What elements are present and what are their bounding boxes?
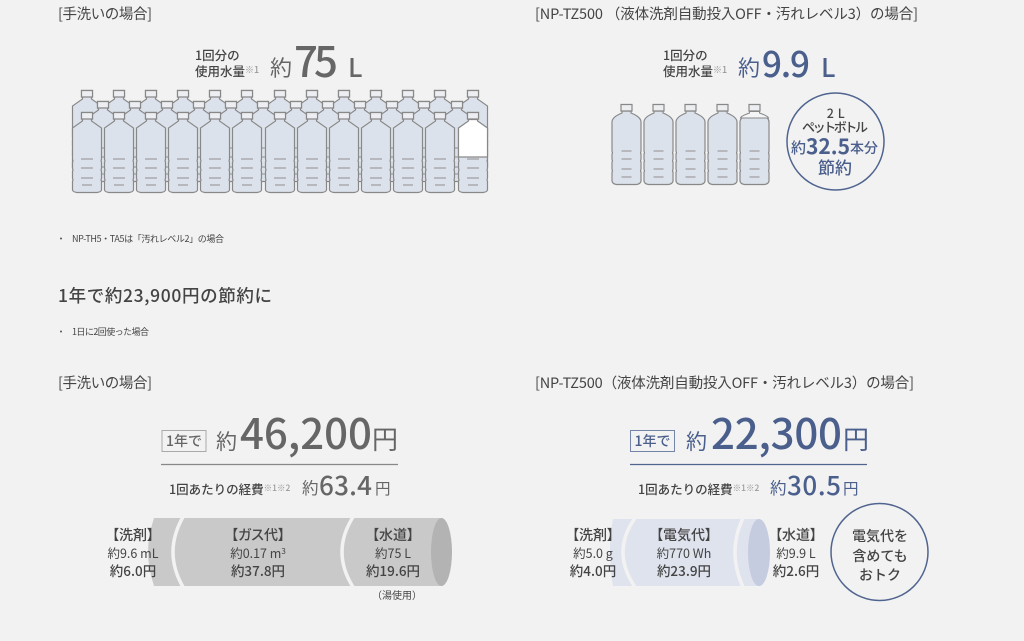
per-wash cost: 63.4 — [319, 466, 372, 503]
per-wash cost: 約 — [770, 475, 786, 499]
footnote: used twice a day: 1日に2回使った場合 — [72, 325, 149, 338]
label: water per wash: 1回分の — [195, 45, 240, 64]
value: 22,300 yen: 円 — [843, 420, 869, 457]
per-wash cost: 30.5 — [787, 466, 841, 503]
heading: NP-TZ500, cost: [NP-TZ500（液体洗剤自動投入OFF・汚れレベル3）の場合] — [535, 372, 914, 393]
badge: 32.5 bottles saved: 節約 — [818, 154, 852, 179]
detergent: 約9.6 mL — [107, 543, 159, 562]
badge: 32.5 bottles saved: ペットボトル — [802, 117, 868, 136]
electricity: 約23.9円 — [657, 560, 711, 580]
badge: includes electricity, still cheaper: おトク — [859, 565, 901, 585]
value: about 75 L — [270, 29, 363, 90]
hand washing water usage figure — [195, 29, 363, 90]
badge: includes electricity, still cheaper — [831, 504, 928, 600]
per-wash cost — [169, 466, 391, 503]
label: water per wash: 使用水量 — [663, 61, 713, 80]
value: about 9.9 L: L — [821, 48, 836, 85]
value: 22,300 yen: 約 — [686, 426, 707, 456]
heading: NP-TZ500, water: [NP-TZ500 （液体洗剤自動投入OFF・汚れレベル3）の場合] — [535, 3, 918, 24]
detergent: 【洗剤】 — [572, 525, 614, 545]
cylinder chart: hand washing costs — [107, 517, 452, 602]
value: about 75 L: 75 — [294, 29, 338, 90]
section heading: annual saving: 1年で約23,900円の節約に — [58, 283, 272, 308]
value: 46,200 yen: 約 — [216, 426, 237, 456]
electricity — [656, 525, 712, 580]
label: water per wash: 1回分の — [663, 45, 708, 64]
badge: 32.5 bottles saved: 本分 — [850, 138, 878, 158]
value: 46,200 yen: 円 — [372, 420, 398, 457]
per-wash cost: 約 — [302, 475, 318, 499]
value: about 9.9 L: 9.9 — [762, 37, 810, 88]
detergent: 約5.0 g — [573, 543, 613, 562]
badge: 32.5 bottles saved: 約 — [791, 137, 806, 158]
detergent: 約6.0円 — [110, 560, 156, 580]
NP-TZ500 water usage figure — [663, 37, 836, 88]
label: water per wash — [663, 45, 727, 80]
electricity: 【電気代】 — [656, 525, 712, 545]
bottle illustration: 9.9 L — [612, 104, 769, 184]
water: 約19.6円 — [366, 560, 420, 580]
annual cost: hand washing — [161, 401, 398, 503]
per-wash cost: 円 — [843, 477, 859, 499]
value: 22,300 yen: 22,300 — [711, 401, 842, 462]
cylinder chart: NP-TZ500 costs — [570, 518, 819, 587]
heading: hand washing, water: [手洗いの場合] — [58, 3, 152, 24]
label: water per wash: ※1 — [245, 63, 259, 76]
label: water per wash: ※1 — [713, 63, 727, 76]
detergent — [107, 525, 159, 580]
per-wash cost — [638, 466, 859, 503]
gas: 約0.17 m — [230, 543, 281, 562]
badge: includes electricity, still cheaper: 含めても — [852, 546, 908, 566]
label: water per wash: 使用水量 — [195, 61, 245, 80]
per-wash cost: 円 — [375, 477, 391, 499]
detergent — [570, 525, 616, 580]
value: 46,200 yen: 46,200 — [240, 401, 372, 462]
per-wash cost: ※1※2 — [264, 482, 290, 494]
water: 【水道】 — [775, 525, 817, 545]
per-wash cost: ※1※2 — [733, 482, 759, 494]
electricity: 約770 Wh — [657, 543, 711, 562]
gas — [230, 525, 286, 580]
per-wash cost: 1回あたりの経費 — [638, 479, 733, 498]
note: hot water: （湯使用） — [372, 587, 422, 602]
tag: per year: 1年で — [635, 431, 670, 451]
heading: hand washing, cost: [手洗いの場合] — [58, 372, 152, 393]
value: about 75 L: 約 — [270, 51, 292, 83]
badge: includes electricity, still cheaper: 電気代を — [852, 526, 908, 546]
label: water per wash — [195, 45, 259, 80]
badge: 32.5 bottles saved: 32.5 — [806, 131, 850, 161]
value: about 9.9 L — [738, 37, 836, 88]
footnote: NP-TH5 TA5: NP-TH5・TA5は「汚れレベル2」の場合 — [72, 232, 224, 245]
bottle illustration: 75 L — [72, 90, 488, 192]
badge: 32.5 bottles saved: 2 L — [827, 103, 845, 122]
per-wash cost: 1回あたりの経費 — [169, 479, 264, 498]
value: about 75 L: L — [348, 48, 363, 85]
annual cost: NP-TZ500 — [630, 401, 869, 503]
value: about 9.9 L: 約 — [738, 51, 760, 83]
detergent: 約4.0円 — [570, 560, 616, 580]
water — [773, 525, 819, 580]
water: 【水道】 — [372, 525, 414, 545]
gas: 約37.8円 — [231, 560, 285, 580]
water: 約9.9 L — [776, 543, 816, 562]
gas: 【ガス代】 — [231, 525, 285, 545]
water: 約2.6円 — [773, 560, 819, 580]
badge: 32.5 bottles saved — [787, 93, 884, 190]
detergent: 【洗剤】 — [112, 525, 154, 545]
tag: per year: 1年で — [166, 431, 202, 451]
water — [366, 525, 420, 580]
gas: 3 — [281, 546, 286, 557]
water: 約75 L — [375, 543, 411, 562]
